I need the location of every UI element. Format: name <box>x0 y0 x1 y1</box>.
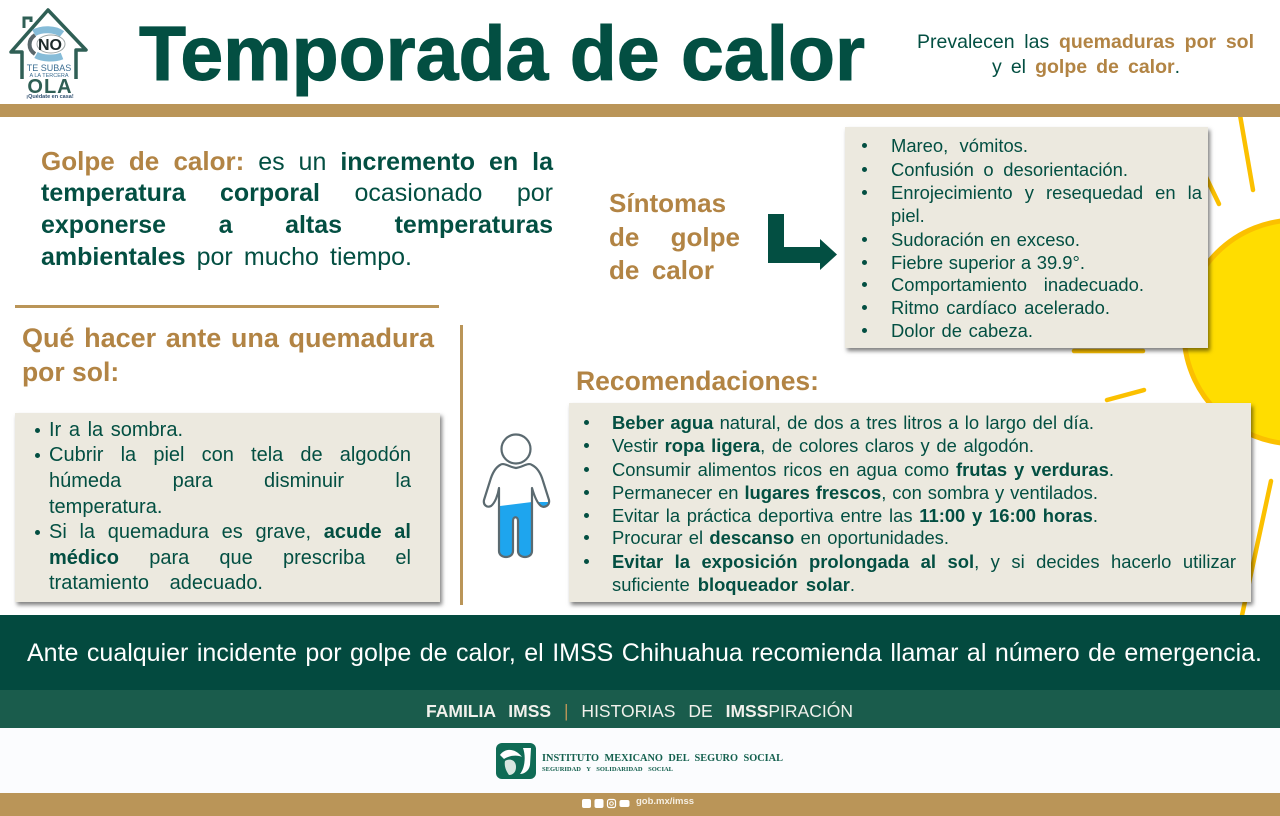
panel: symptoms list: Confusión o desorientación. <box>891 159 1128 180</box>
title: Temporada de calor <box>139 11 865 97</box>
heading: síntomas de golpe de calor: Síntomas <box>609 188 726 218</box>
white footer area with IMSS logo <box>0 728 1280 793</box>
panel: burn care list: Cubrir la piel con tela de algodón <box>49 444 411 466</box>
panel: recommendations list: Beber agua natural, de dos a tres litros a lo largo del día. <box>612 412 1094 433</box>
gold footer band <box>0 793 1280 816</box>
logo: No te subas a la tercera ola <box>9 8 88 100</box>
institute name: INSTITUTO MEXICANO DEL SEGURO SOCIAL <box>542 753 783 764</box>
heading: qué hacer ante una quemadura <box>22 323 434 387</box>
logo: No te subas a la tercera ola: TE SUBAS <box>27 63 71 73</box>
arrow to symptoms <box>768 214 837 270</box>
panel: symptoms list: Enrojecimiento y resequedad en la <box>891 182 1202 203</box>
panel: burn care list: tratamiento adecuado. <box>49 572 263 594</box>
subtitle: quemaduras y golpe de calor: Prevalecen las quemaduras por sol <box>917 31 1254 53</box>
institute motto: SEGURIDAD Y SOLIDARIDAD SOCIAL <box>542 766 673 773</box>
logo: No te subas a la tercera ola: NO <box>38 37 62 54</box>
top gold band <box>0 104 1280 117</box>
panel: burn care list: Ir a la sombra. <box>49 419 183 441</box>
logo: No te subas a la tercera ola: A LA TERCERA <box>29 73 69 79</box>
heading: qué hacer ante una quemadura: Qué hacer ante una quemadura <box>22 323 434 353</box>
definition: golpe de calor: ambientales por mucho tiempo. <box>41 243 412 271</box>
icon: IMSS emblem <box>496 743 536 779</box>
panel: recommendations list: Evitar la práctica deportiva entre las 11:00 y 16:00 horas. <box>612 505 1098 526</box>
band: familia IMSS <box>0 690 1280 728</box>
panel: recommendations list: Procurar el descanso en oportunidades. <box>612 527 949 548</box>
panel: burn care list: Si la quemadura es grave, acude al <box>49 521 411 543</box>
panel: recommendations list: Evitar la exposición prolongada al sol, y si decides hacerlo utilizar <box>612 551 1236 572</box>
panel: burn care list <box>15 413 440 602</box>
panel: burn care list: húmeda para disminuir la <box>49 470 411 492</box>
heading: recomendaciones: Recomendaciones: <box>576 366 819 396</box>
logo: No te subas a la tercera ola: ¡Quédate en casa! <box>26 94 74 100</box>
panel: symptoms list: Fiebre superior a 39.9°. <box>891 252 1085 273</box>
definition: golpe de calor: exponerse a altas temperaturas <box>41 211 553 239</box>
divider: gold rule above burn section <box>15 305 439 308</box>
heading: síntomas de golpe de calor <box>609 188 740 285</box>
band: familia IMSS: FAMILIA IMSS | HISTORIAS DE IMSSPIRACIÓN <box>426 701 853 721</box>
website: gob.mx/imss <box>636 796 694 807</box>
definition: golpe de calor: temperatura corporal ocasionado por <box>41 179 553 207</box>
panel: symptoms list: Sudoración en exceso. <box>891 229 1080 250</box>
panel: recommendations list <box>569 403 1251 602</box>
panel: burn care list: médico para que prescriba el <box>49 547 411 569</box>
subtitle: quemaduras y golpe de calor: y el golpe de calor. <box>992 56 1180 78</box>
panel: recommendations list: Vestir ropa ligera, de colores claros y de algodón. <box>612 435 1034 456</box>
definition: golpe de calor <box>41 146 554 271</box>
panel: symptoms list: piel. <box>891 205 925 226</box>
heading: síntomas de golpe de calor: de calor <box>609 255 714 285</box>
heading: qué hacer ante una quemadura: por sol: <box>22 357 119 387</box>
sun illustration with rays <box>1072 117 1280 615</box>
subtitle: quemaduras y golpe de calor <box>917 31 1254 78</box>
panel: symptoms list: Ritmo cardíaco acelerado. <box>891 297 1110 318</box>
panel: symptoms list: Dolor de cabeza. <box>891 320 1033 341</box>
panel: recommendations list: suficiente bloqueador solar. <box>612 574 855 595</box>
heading: síntomas de golpe de calor: de golpe <box>609 222 740 252</box>
definition: golpe de calor: Golpe de calor: es un incremento en la <box>41 146 553 176</box>
panel: symptoms list: Comportamiento inadecuado. <box>891 274 1144 295</box>
icons: social media <box>582 798 630 808</box>
icon: person filling with water <box>482 433 550 558</box>
panel: symptoms list <box>845 127 1208 348</box>
logo: No te subas a la tercera ola: OLA <box>27 76 73 98</box>
panel: recommendations list: Permanecer en lugares frescos, con sombra y ventilados. <box>612 482 1098 503</box>
panel: burn care list: temperatura. <box>49 496 162 518</box>
panel: recommendations list: Consumir alimentos ricos en agua como frutas y verduras. <box>612 459 1114 480</box>
divider: vertical gold rule <box>460 325 463 605</box>
emergency banner <box>0 615 1280 690</box>
emergency banner: Ante cualquier incidente por golpe de calor, el IMSS Chihuahua recomienda llamar al número de emergencia. <box>27 639 1262 667</box>
panel: symptoms list: Mareo, vómitos. <box>891 135 1028 156</box>
